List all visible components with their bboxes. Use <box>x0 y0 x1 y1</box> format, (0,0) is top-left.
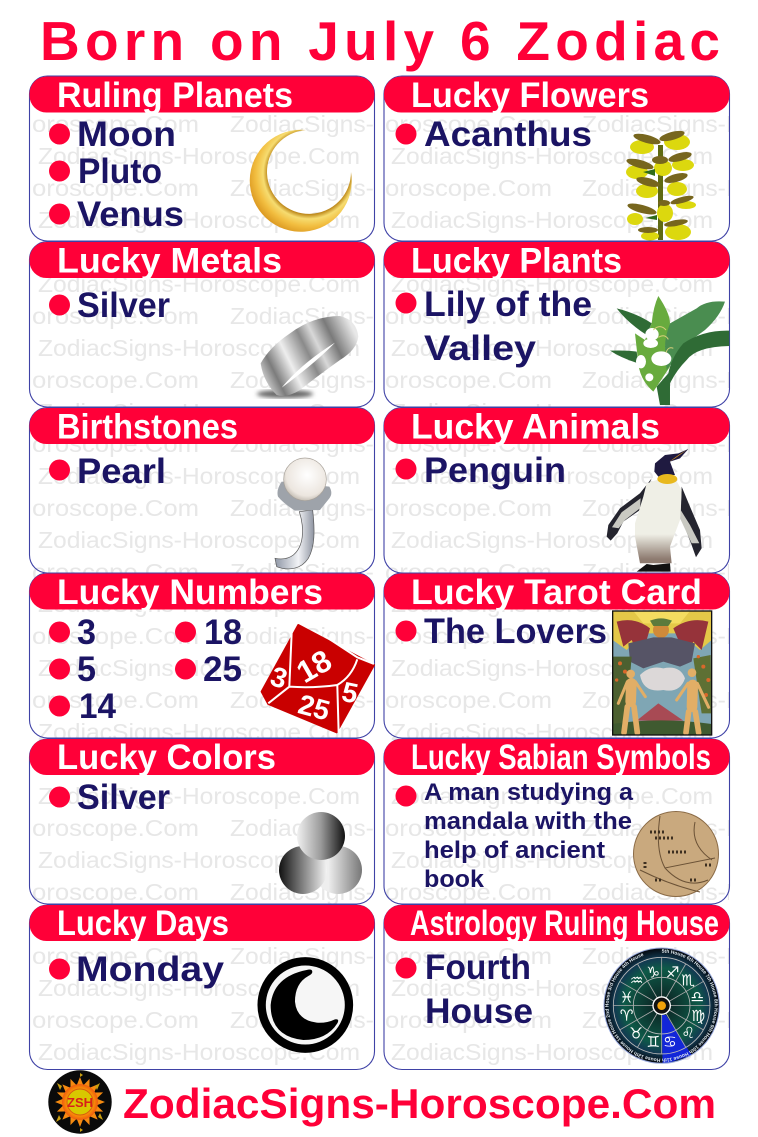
heading: lucky tarot card: Lucky Tarot Card <box>411 573 702 612</box>
background watermark: oroscope.Com <box>385 111 552 137</box>
background watermark: ZodiacSigns-Horoscope.Com <box>391 911 713 937</box>
list: house: House <box>425 992 533 1031</box>
background watermark: ZodiacSigns-Horoscope.Com <box>391 335 713 361</box>
background watermark: ZodiacSigns-Horoscope.Com <box>230 431 552 457</box>
background watermark: ZodiacSigns-Horoscope.Com <box>38 719 360 745</box>
panel: lucky animals <box>384 408 730 573</box>
heading: lucky numbers: Lucky Numbers <box>57 573 323 612</box>
icon: pearl ring <box>275 458 331 569</box>
zodiac glyphs: ♓︎ <box>620 989 634 1007</box>
background watermark: ZodiacSigns-Horoscope.Com <box>38 911 360 937</box>
background watermark: ZodiacSigns-Horoscope.Com <box>38 975 360 1001</box>
panel: lucky tarot card <box>384 573 730 738</box>
icon: golden crescent moon <box>250 130 352 232</box>
background watermark: ZodiacSigns-Horoscope.Com <box>38 399 360 425</box>
background watermark: ZodiacSigns-Horoscope.Com <box>230 943 552 969</box>
background watermark: ZodiacSigns-Horoscope.Com <box>230 559 552 585</box>
list: animals: Penguin <box>424 451 566 490</box>
background watermark: oroscope.Com <box>32 943 199 969</box>
list: colors: Silver <box>77 778 170 817</box>
background watermark: ZodiacSigns-Horoscope.Com <box>391 655 713 681</box>
background watermark: ZodiacSigns-Horoscope.Com <box>230 303 552 329</box>
icon: ancient astrological chart <box>634 812 718 896</box>
list: planets: Venus <box>77 195 184 234</box>
zodiac glyphs: ♈︎ <box>620 1006 634 1024</box>
icon: the lovers tarot card <box>613 611 712 735</box>
icon: red dice <box>262 625 374 732</box>
icon: red dice: 18 <box>291 643 338 690</box>
background watermark: oroscope.Com <box>385 559 552 585</box>
background watermark: ZodiacSigns-Horoscope.Com <box>391 975 713 1001</box>
icon: red dice: 5 <box>339 676 361 709</box>
list: plants <box>396 285 592 368</box>
panel: astrology ruling house <box>383 904 730 1070</box>
background watermark: oroscope.Com <box>32 111 199 137</box>
footer website text: ZodiacSigns-Horoscope.Com <box>123 1080 716 1127</box>
list: numbers <box>49 613 242 726</box>
icon: silver ring <box>257 316 358 398</box>
panel: lucky sabian symbols <box>384 738 730 904</box>
panel: lucky flowers <box>384 76 730 241</box>
background watermark: oroscope.Com <box>32 303 199 329</box>
background watermark: oroscope.Com <box>32 559 199 585</box>
panel: lucky numbers <box>30 573 374 738</box>
background watermark: ZodiacSigns-Horoscope.Com <box>230 815 552 841</box>
background watermark: ZodiacSigns-Horoscope.Com <box>391 207 713 233</box>
background watermark: ZodiacSigns-Horoscope.Com <box>38 463 360 489</box>
zodiac glyphs: ♑︎ <box>646 963 660 981</box>
background watermark: ZodiacSigns-Horoscope.Com <box>391 463 713 489</box>
background watermark: ZodiacSigns-Horoscope.Com <box>391 719 713 745</box>
list: flowers: Acanthus <box>424 115 592 154</box>
text: sabian symbol <box>396 779 633 893</box>
background watermark: ZodiacSigns-Horoscope.Com <box>230 495 552 521</box>
list: numbers: 5 <box>77 650 96 689</box>
text: sabian symbol: help of ancient <box>424 837 605 864</box>
background watermark: oroscope.Com <box>385 431 552 457</box>
list: numbers: 18 <box>204 613 242 652</box>
background watermark: oroscope.Com <box>32 175 199 201</box>
background watermark: ZodiacSigns-Horoscope.Com <box>230 1007 552 1033</box>
background watermark: ZodiacSigns-Horoscope.Com <box>38 335 360 361</box>
list: metals: Silver <box>77 286 170 325</box>
background watermark: oroscope.Com <box>385 1007 552 1033</box>
zodiac glyphs: ♊︎ <box>646 1033 660 1051</box>
background watermark: oroscope.Com <box>32 815 199 841</box>
background watermark: ZodiacSigns-Horoscope.Com <box>391 847 713 873</box>
zodiac glyphs: ♉︎ <box>629 1025 643 1043</box>
panel: lucky plants <box>384 242 730 407</box>
list: planets: Pluto <box>78 152 162 191</box>
background watermark: ZodiacSigns-Horoscope.Com <box>230 111 552 137</box>
zodiac glyphs: ♍︎ <box>691 1007 705 1025</box>
heading: lucky animals: Lucky Animals <box>411 408 660 446</box>
icon: silver spheres <box>279 812 362 894</box>
list: numbers: 14 <box>79 687 117 726</box>
panel: lucky metals <box>30 242 374 407</box>
background watermark: ZodiacSigns-Horoscope.Com <box>391 271 713 297</box>
list: plants: Valley <box>424 329 537 368</box>
heading: ruling planets: Ruling Planets <box>57 76 293 115</box>
background watermark: oroscope.Com <box>385 495 552 521</box>
background watermark: oroscope.Com <box>385 175 552 201</box>
background watermark: ZodiacSigns-Horoscope.Com <box>38 143 360 169</box>
zodiac glyphs: ♒︎ <box>630 971 644 989</box>
background watermark: oroscope.Com <box>32 1007 199 1033</box>
background watermark: oroscope.Com <box>385 815 552 841</box>
list: planets: Moon <box>77 115 176 154</box>
heading: lucky plants: Lucky Plants <box>411 242 622 280</box>
background watermark: ZodiacSigns-Horoscope.Com <box>38 655 360 681</box>
background watermark: ZodiacSigns-Horoscope.Com <box>38 1039 360 1065</box>
icon: red dice: 25 <box>295 688 333 726</box>
icon: penguin <box>607 449 702 572</box>
background watermark: ZodiacSigns-Horoscope.Com <box>230 879 552 905</box>
panel: lucky days <box>30 904 374 1070</box>
zodiac glyphs: ♏︎ <box>681 972 695 990</box>
icon: lily of the valley <box>610 296 729 405</box>
icon: red dice: 3 <box>267 660 291 695</box>
text: sabian symbol: mandala with the <box>424 808 632 835</box>
zodiac glyphs: ♋︎ <box>663 1033 677 1051</box>
background watermark: oroscope.Com <box>32 495 199 521</box>
background watermark: ZodiacSigns-Horoscope.Com <box>391 591 713 617</box>
background watermark: ZodiacSigns-Horoscope.Com <box>230 687 552 713</box>
text: sabian symbol: book <box>424 866 484 893</box>
background watermark: ZodiacSigns-Horoscope.Com <box>38 783 360 809</box>
background watermark: oroscope.Com <box>385 303 552 329</box>
background watermark: ZodiacSigns-Horoscope.Com <box>230 367 552 393</box>
footer logo <box>48 1070 112 1134</box>
text: sabian symbol: A man studying a <box>424 779 633 806</box>
list: plants: Lily of the <box>424 285 592 324</box>
panel: lucky colors <box>30 738 374 904</box>
list: days: Monday <box>76 950 225 989</box>
heading: lucky days: Lucky Days <box>57 904 229 943</box>
background watermark: oroscope.Com <box>32 367 199 393</box>
background watermark: oroscope.Com <box>32 687 199 713</box>
heading: lucky flowers: Lucky Flowers <box>411 76 649 115</box>
list: stones: Pearl <box>77 452 166 491</box>
background watermark: oroscope.Com <box>385 687 552 713</box>
outer house labels: 5th House 6th House 7th House 8th House 9th House 10th House 11th House 12th House 1st House 2nd House 3rd House 4th House <box>605 949 718 1062</box>
title: Born on July 6 Zodiac <box>40 10 720 72</box>
background watermark: ZodiacSigns-Horoscope.Com <box>391 783 713 809</box>
background watermark: ZodiacSigns-Horoscope.Com <box>230 175 552 201</box>
icon: acanthus flower <box>625 129 696 240</box>
list: numbers: 3 <box>77 613 96 652</box>
heading: lucky metals: Lucky Metals <box>57 242 282 280</box>
zodiac glyphs <box>620 963 705 1051</box>
zodiac glyphs: ♐︎ <box>666 963 680 981</box>
list: house: Fourth <box>425 948 531 987</box>
background watermark: oroscope.Com <box>385 943 552 969</box>
zodiac glyphs: ♎︎ <box>690 988 704 1006</box>
background watermark: ZodiacSigns-Horoscope.Com <box>391 1039 713 1065</box>
list: numbers: 25 <box>203 650 242 689</box>
background watermark: oroscope.Com <box>32 879 199 905</box>
background watermark: ZodiacSigns-Horoscope.Com <box>391 399 713 425</box>
background watermark: oroscope.Com <box>385 623 552 649</box>
background watermark: ZodiacSigns-Horoscope.Com <box>391 143 713 169</box>
background watermark: ZodiacSigns-Horoscope.Com <box>38 527 360 553</box>
icon: astrology house wheel <box>604 948 720 1064</box>
background watermark: oroscope.Com <box>32 431 199 457</box>
background watermark: ZodiacSigns-Horoscope.Com <box>38 271 360 297</box>
background watermark: oroscope.Com <box>385 879 552 905</box>
list: planets <box>49 115 184 234</box>
background watermark: oroscope.Com <box>385 367 552 393</box>
heading: lucky colors: Lucky Colors <box>57 738 276 777</box>
list: tarot: The Lovers <box>424 612 607 651</box>
icon: moon symbol <box>262 961 349 1049</box>
footer logo: ZSH <box>67 1095 93 1110</box>
zodiac glyphs: ♌︎ <box>681 1024 695 1042</box>
background watermark: ZodiacSigns-Horoscope.Com <box>38 591 360 617</box>
background watermark: ZodiacSigns-Horoscope.Com <box>391 527 713 553</box>
background watermark: ZodiacSigns-Horoscope.Com <box>38 207 360 233</box>
background watermark: oroscope.Com <box>32 623 199 649</box>
background watermark: ZodiacSigns-Horoscope.Com <box>230 623 552 649</box>
list: house <box>396 948 533 1031</box>
panel: birthstones <box>30 408 374 573</box>
panel: ruling planets <box>30 76 374 241</box>
background watermark: ZodiacSigns-Horoscope.Com <box>38 847 360 873</box>
heading: birthstones: Birthstones <box>57 408 238 446</box>
